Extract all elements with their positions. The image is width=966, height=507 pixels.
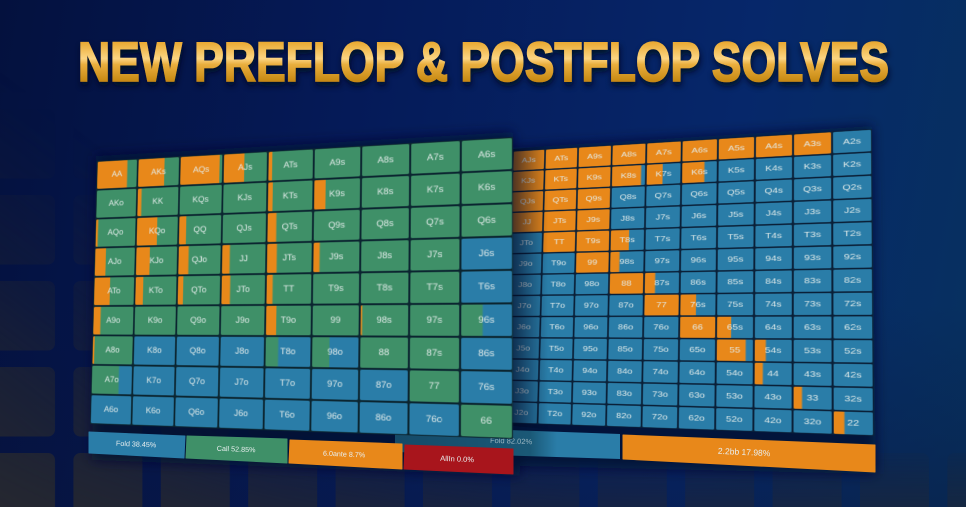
row: T hands: T6s xyxy=(478,281,495,292)
row: T hands: QTo xyxy=(191,285,207,295)
row: 4 hands: 43s xyxy=(804,370,821,379)
row: 2 hands: 92o xyxy=(581,410,597,420)
row: 7 hands: 87o xyxy=(376,380,392,391)
row: 5 hands: 95o xyxy=(583,345,598,353)
row: 8 hands: K8o xyxy=(147,346,162,356)
row: A hands: ATs xyxy=(283,160,298,171)
background: rounded square tile pattern xyxy=(0,228,966,507)
row: J hands: J3s xyxy=(804,207,821,217)
row: K suited hands: KTs xyxy=(553,175,568,184)
row: 9 hands: 98s xyxy=(377,315,392,326)
row: Q suited hands: Q6s xyxy=(690,189,708,199)
row: Q hands: QJs xyxy=(236,223,252,234)
row: 5 hands: 75o xyxy=(653,345,669,354)
row: A hands: A7s xyxy=(427,152,444,163)
row: 3 hands: 73o xyxy=(652,390,668,399)
row: 2 hands: 22 xyxy=(847,418,859,428)
row: 5 hands: 53s xyxy=(804,346,821,356)
legend bar: 2.2bb: 2.2bb 17.98% xyxy=(718,446,771,458)
row: K hands xyxy=(96,170,512,218)
row: Q suited hands: Q7s xyxy=(655,191,672,200)
row: A suited hands: A9s xyxy=(587,152,602,161)
row: 2 hands: 52o xyxy=(726,415,743,424)
row: J hands: J6s xyxy=(479,248,494,259)
row: A hands: A8s xyxy=(377,154,394,166)
row: K suited hands: K2s xyxy=(843,159,861,169)
legend bar: fold: Fold 38.45% xyxy=(116,439,157,449)
row: A suited hands: A2s xyxy=(843,137,861,147)
legend bar: 6.0ante xyxy=(289,440,402,469)
row: 7 hands: 75s xyxy=(727,300,743,309)
row: 7 hands: K7o xyxy=(146,376,161,386)
row: A suited hands: A7s xyxy=(656,148,672,157)
row: 8 hands: 83s xyxy=(804,276,821,286)
row: Q suited hands: Q3s xyxy=(803,184,822,194)
row: K suited hands: KJs xyxy=(521,176,535,185)
row: 6 hands: 96o xyxy=(327,411,342,422)
row: 2 hands: T2o xyxy=(547,409,562,418)
row: 9 hands: K9o xyxy=(148,316,162,326)
row: J hands: J2s xyxy=(844,206,861,215)
row: 9 hands: T9o xyxy=(281,315,296,326)
row: 9 hands: A9o xyxy=(106,316,120,326)
row: 5 hands: T5o xyxy=(549,344,564,353)
row: 2 hands: 82o xyxy=(616,411,632,421)
row: K hands: K8s xyxy=(377,186,393,198)
row: 4 hands: 54o xyxy=(726,368,743,378)
row: A suited hands: A5s xyxy=(728,143,745,153)
row: 5 hands: 65o xyxy=(689,345,705,355)
row: T hands: T6s xyxy=(691,233,707,243)
row: T hands: T5s xyxy=(727,232,744,242)
row: 9 hands: 99 xyxy=(330,315,341,326)
row: 8 hands: 88 xyxy=(621,279,632,288)
row: J hands xyxy=(94,237,512,276)
row: 7 hands: 73s xyxy=(804,299,821,309)
row: 7 hands xyxy=(92,366,512,404)
row: T hands xyxy=(512,222,872,253)
row: 7 hands xyxy=(512,292,872,316)
row: A hands: A9s xyxy=(329,157,345,168)
row: J hands: AJo xyxy=(108,257,122,267)
row: 8 hands: 84s xyxy=(765,277,782,286)
row: 6 hands: 63s xyxy=(804,323,821,332)
row: 9 hands: 97s xyxy=(655,256,670,266)
row: 6 hands: 86o xyxy=(375,412,391,424)
row: 6 hands: 96o xyxy=(583,323,598,332)
row: 7 hands: 76s xyxy=(690,300,706,309)
row: 3 hands: 53o xyxy=(726,391,743,401)
legend bar: 6.0ante: 6.0ante 8.7% xyxy=(323,449,366,459)
row: K suited hands: K9s xyxy=(586,173,602,182)
row: 2 hands xyxy=(512,402,874,436)
row: K suited hands: K8s xyxy=(621,171,636,180)
row: 4 hands: 74o xyxy=(652,367,668,377)
row: 8 hands: T8o xyxy=(550,280,566,289)
row: 7 hands: 87o xyxy=(618,301,634,310)
row: 6 hands: Q6o xyxy=(188,407,204,418)
row: K hands: KK xyxy=(152,196,163,207)
row: J hands: J9s xyxy=(329,252,343,262)
row: T hands: T4s xyxy=(765,231,782,241)
row: J hands: J9s xyxy=(586,215,600,224)
row: 9 hands: J9o xyxy=(236,315,250,326)
row: 8 hands: 86s xyxy=(478,348,495,359)
row: J hands: J8s xyxy=(377,250,392,261)
row: J hands: QJo xyxy=(192,255,207,265)
row: J hands: J6s xyxy=(691,211,706,221)
row: T hands: TT xyxy=(283,284,294,294)
row: 6 hands: T6o xyxy=(279,410,295,421)
row: 6 hands: T6o xyxy=(549,323,565,331)
row: Q suited hands: QTs xyxy=(552,195,568,205)
row: 6 hands: 86o xyxy=(618,323,633,332)
row: Q hands: QQ xyxy=(193,225,207,235)
row: 6 hands: J6o xyxy=(517,323,531,331)
row: 7 hands: T7o xyxy=(550,301,565,310)
row: Q suited hands: QJs xyxy=(520,197,535,206)
row: 8 hands: 87s xyxy=(426,348,442,359)
row: 2 hands: J2o xyxy=(514,408,528,417)
row: J hands: JTs xyxy=(282,253,296,263)
row: T hands: T9s xyxy=(328,283,344,294)
row: 7 hands: 77 xyxy=(429,381,440,392)
row: A suited hands: ATs xyxy=(554,154,568,163)
row: 8 hands: 88 xyxy=(379,347,389,358)
legend bar: 2.2bb xyxy=(623,435,875,472)
row: 6 hands: 66 xyxy=(481,415,492,427)
row: K hands: K9s xyxy=(329,188,345,200)
row: 8 hands: 98o xyxy=(584,280,599,288)
row: 9 hands xyxy=(512,246,872,274)
row: Q hands: Q6s xyxy=(477,215,496,226)
row: A suited hands: A6s xyxy=(691,146,708,155)
row: 5 hands: 85o xyxy=(617,345,633,354)
row: 7 hands: 76s xyxy=(478,382,495,393)
row: 9 hands: T9o xyxy=(551,259,566,268)
row: A suited hands: A4s xyxy=(765,141,783,151)
row: K suited hands: K5s xyxy=(728,165,745,175)
row: T hands: T8s xyxy=(620,236,635,245)
row: 2 hands: 62o xyxy=(688,413,705,423)
row: A suited hands: AJs xyxy=(522,156,536,165)
row: 7 hands: Q7o xyxy=(189,376,205,387)
row: 2 hands: 42o xyxy=(764,416,781,426)
row: 8 hands: 82s xyxy=(844,276,861,285)
row: A hands: A6s xyxy=(478,149,495,161)
row: 6 hands: 76o xyxy=(653,323,669,332)
legend bar: fold: Fold 82.02% xyxy=(490,436,533,446)
row: 9 hands: 94s xyxy=(765,254,782,263)
row: K hands: K7s xyxy=(427,184,444,196)
row: 6 hands: 66 xyxy=(692,323,703,332)
row: K hands: K6s xyxy=(478,182,495,193)
row: 8 hands: J8o xyxy=(518,281,532,289)
row: A hands: AJs xyxy=(238,162,252,173)
row: 8 hands: Q8o xyxy=(190,346,206,356)
row: 3 hands: 43o xyxy=(764,392,782,402)
row: 3 hands xyxy=(512,381,873,411)
row: A hands: AQs xyxy=(193,164,209,175)
row: 4 hands: T4o xyxy=(548,366,564,375)
row: 5 hands: 55 xyxy=(729,346,740,355)
row: J hands: J4s xyxy=(766,208,782,218)
row: K suited hands: K4s xyxy=(765,163,782,173)
row: T hands: JTo xyxy=(236,284,250,295)
row: J hands: JJ xyxy=(523,218,531,226)
row: 4 hands: J4o xyxy=(515,365,530,374)
row: Q suited hands: Q2s xyxy=(842,182,862,192)
row: 4 hands xyxy=(512,360,873,387)
row: A suited hands xyxy=(513,130,872,171)
row: T hands: T2s xyxy=(844,229,861,239)
row: J hands: J8s xyxy=(620,214,635,223)
row: 4 hands: 64o xyxy=(689,368,705,377)
row: 9 hands: J9o xyxy=(519,260,533,268)
row: 5 hands: J5o xyxy=(516,344,530,353)
row: 9 hands: 96s xyxy=(691,256,706,265)
row: 8 hands: 85s xyxy=(727,277,743,287)
legend bar: allin xyxy=(404,445,513,474)
row: 3 hands: 32s xyxy=(844,394,862,404)
row: T hands: T3s xyxy=(804,230,821,240)
row: T hands: KTo xyxy=(149,286,163,296)
row: 7 hands: 97o xyxy=(584,301,599,310)
row: J hands: JTs xyxy=(553,217,566,225)
row: A hands: AKs xyxy=(151,167,166,177)
row: 6 hands: K6o xyxy=(146,406,160,416)
row: T hands: T7s xyxy=(655,234,670,244)
row: K hands: KQs xyxy=(192,194,209,205)
row: 3 hands: 63o xyxy=(689,391,705,400)
row: T hands: T9s xyxy=(585,237,600,246)
row: K hands: KTs xyxy=(283,191,298,201)
legend bar: call xyxy=(186,436,287,463)
row: 5 hands: 52s xyxy=(844,346,862,356)
row: J hands: KJo xyxy=(149,256,164,266)
row: Q hands: KQo xyxy=(149,226,165,236)
row: 8 hands: T8o xyxy=(280,347,296,357)
row: Q hands xyxy=(95,204,512,247)
row: 6 hands: J6o xyxy=(234,408,248,419)
row: 7 hands: J7o xyxy=(234,377,249,388)
row: 8 hands: 98o xyxy=(327,347,343,358)
row: T hands xyxy=(94,270,512,306)
row: J hands: J7s xyxy=(655,213,670,222)
row: 6 hands: 76o xyxy=(426,414,442,425)
row: 8 hands: 87s xyxy=(654,278,669,287)
row: 8 hands: 86s xyxy=(690,278,706,287)
row: 9 hands: 98s xyxy=(619,257,634,266)
row: J hands: J7s xyxy=(427,249,442,260)
row: T hands: TT xyxy=(554,238,565,246)
row: 7 hands: 97o xyxy=(327,379,343,390)
row: 9 hands: 99 xyxy=(587,258,597,267)
row: Q hands: AQo xyxy=(107,227,123,238)
row: 9 hands: 92s xyxy=(844,252,861,262)
row: A suited hands: A3s xyxy=(804,139,821,149)
row: 3 hands: 83o xyxy=(616,389,632,398)
row: 3 hands: 93o xyxy=(582,388,597,397)
row: K suited hands xyxy=(512,152,872,192)
row: Q suited hands: Q8s xyxy=(620,192,636,202)
row: 2 hands: 32o xyxy=(804,417,821,427)
row: T hands: JTo xyxy=(520,239,533,247)
row: 6 hands: A6o xyxy=(104,405,118,415)
row: Q suited hands: Q9s xyxy=(585,194,602,203)
panel: postflop range grid (right) xyxy=(504,129,874,436)
row: 3 hands: J3o xyxy=(515,387,529,396)
row: J hands: JJ xyxy=(239,254,248,264)
row: Q suited hands xyxy=(512,176,872,212)
row: 6 hands: 64s xyxy=(765,323,781,332)
row: 4 hands: 42s xyxy=(844,370,862,380)
row: 6 hands: 62s xyxy=(844,323,861,332)
row: A suited hands: A8s xyxy=(621,150,637,159)
row: 3 hands: 33 xyxy=(807,393,818,403)
row: 6 hands xyxy=(512,316,873,339)
row: 9 hands: 96s xyxy=(478,315,495,326)
row: 7 hands: 74s xyxy=(765,300,782,309)
row: 4 hands: 84o xyxy=(617,367,633,376)
row: 5 hands xyxy=(512,338,873,363)
row: Q hands: Q9s xyxy=(328,220,345,231)
row: J hands: J5s xyxy=(728,210,743,219)
row: K suited hands: K3s xyxy=(804,161,821,171)
row: K hands: AKo xyxy=(109,198,124,209)
row: 9 hands: 97s xyxy=(427,315,442,326)
row: 7 hands: T7o xyxy=(280,378,295,389)
legend bar: fold xyxy=(89,432,185,458)
panel: preflop range grid (left) xyxy=(90,137,513,439)
row: K hands: KJs xyxy=(237,193,252,203)
row: Q hands: QTs xyxy=(282,221,298,232)
row: T hands: T8s xyxy=(377,283,392,293)
row: T hands: ATo xyxy=(107,286,121,296)
row: 2 hands: 72o xyxy=(652,412,668,422)
row: 9 hands: Q9o xyxy=(190,315,206,326)
row: 3 hands: T3o xyxy=(547,387,563,397)
row: 4 hands: 94o xyxy=(582,366,598,375)
legend bar: fold xyxy=(395,426,620,459)
row: A hands: AA xyxy=(112,169,122,179)
row: K suited hands: K7s xyxy=(655,169,672,179)
row: 8 hands xyxy=(512,269,872,295)
row: Q suited hands: Q4s xyxy=(765,186,783,196)
row: Q hands: Q7s xyxy=(426,217,444,228)
row: 6 hands xyxy=(90,395,512,438)
row: 7 hands: A7o xyxy=(105,375,119,385)
row: A hands xyxy=(96,138,512,189)
legend bar: allin: AllIn 0.0% xyxy=(440,454,474,464)
row: 9 hands: 93s xyxy=(804,253,821,263)
row: K suited hands: K6s xyxy=(691,167,708,177)
row: T hands: T7s xyxy=(426,282,443,293)
row: 9 hands: 95s xyxy=(727,255,743,264)
row: 7 hands: J7o xyxy=(517,302,531,310)
row: 8 hands: A8o xyxy=(105,345,120,355)
row: 7 hands: 72s xyxy=(844,299,861,309)
legend bar: call: Call 52.85% xyxy=(217,444,256,454)
row: Q hands: Q8s xyxy=(376,218,394,229)
row: 8 hands: J8o xyxy=(235,346,249,357)
row: 6 hands: 65s xyxy=(727,323,743,332)
row: 8 hands xyxy=(92,336,512,370)
row: J hands xyxy=(512,198,872,232)
row: 7 hands: 77 xyxy=(656,301,667,310)
row: 9 hands xyxy=(93,304,512,336)
row: Q suited hands: Q5s xyxy=(727,188,745,197)
row: 5 hands: 54s xyxy=(765,346,781,355)
row: 4 hands: 44 xyxy=(767,369,779,379)
